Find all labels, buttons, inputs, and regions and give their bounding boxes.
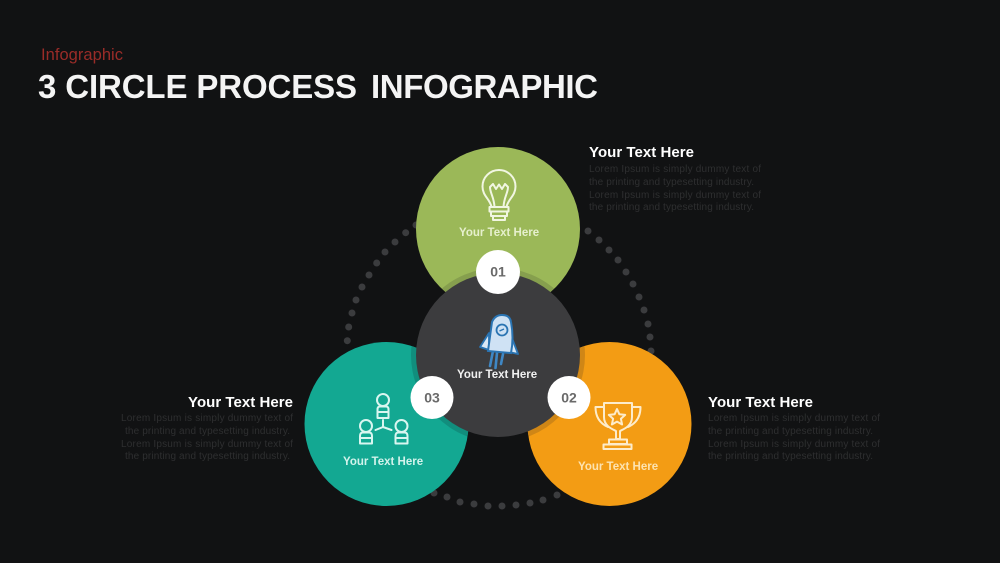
text block: bottom left: Lorem Ipsum is simply dummy text of — [121, 439, 293, 450]
title: 3 CIRCLE PROCESS — [38, 68, 357, 105]
badge: 03: 03 — [424, 390, 440, 406]
text block: bottom right: the printing and typesetting industry. — [708, 451, 873, 462]
icon: trophy — [596, 403, 640, 449]
text block: bottom right: Lorem Ipsum is simply dummy text of — [708, 439, 880, 450]
title — [38, 68, 598, 105]
label: centre circle: Your Text Here — [457, 369, 537, 381]
badge: 02: 02 — [561, 390, 577, 406]
badge: 03 — [410, 376, 454, 419]
text block: bottom left: the printing and typesetting industry. — [125, 426, 290, 437]
label: teal circle: Your Text Here — [343, 456, 423, 468]
text block: bottom left: Lorem Ipsum is simply dummy text of — [121, 413, 293, 424]
icon: rocket — [480, 315, 518, 368]
text block: top right: the printing and typesetting industry. — [589, 177, 754, 188]
text block: top right: Lorem Ipsum is simply dummy text of — [589, 190, 761, 201]
title: INFOGRAPHIC — [371, 68, 598, 105]
text block: top right — [589, 144, 761, 213]
label: green circle: Your Text Here — [459, 227, 539, 239]
text block: top right: Lorem Ipsum is simply dummy text of — [589, 164, 761, 175]
panel: centre circle — [416, 273, 580, 437]
text block: bottom right — [708, 394, 880, 462]
text block: bottom left — [121, 394, 293, 462]
text block: bottom left: Your Text Here — [188, 394, 293, 411]
text block: bottom right: Your Text Here — [708, 394, 813, 411]
badge: 01 — [476, 250, 520, 294]
icon: light bulb — [482, 170, 516, 220]
text block: top right: the printing and typesetting industry. — [589, 202, 754, 213]
text block: bottom left: the printing and typesetting industry. — [125, 451, 290, 462]
dotted ring — [344, 222, 654, 510]
panel: teal circle — [304, 342, 468, 506]
text block: bottom right: Lorem Ipsum is simply dummy text of — [708, 413, 880, 424]
panel: green circle — [416, 147, 580, 292]
badge: 02 — [548, 376, 590, 419]
badge: 01: 01 — [490, 264, 506, 280]
subtitle: Infographic — [41, 46, 123, 64]
panel: orange circle — [528, 342, 692, 506]
text block: top right: Your Text Here — [589, 144, 694, 161]
text block: bottom right: the printing and typesetting industry. — [708, 426, 873, 437]
icon: connected people — [360, 394, 408, 444]
label: orange circle: Your Text Here — [578, 461, 658, 473]
